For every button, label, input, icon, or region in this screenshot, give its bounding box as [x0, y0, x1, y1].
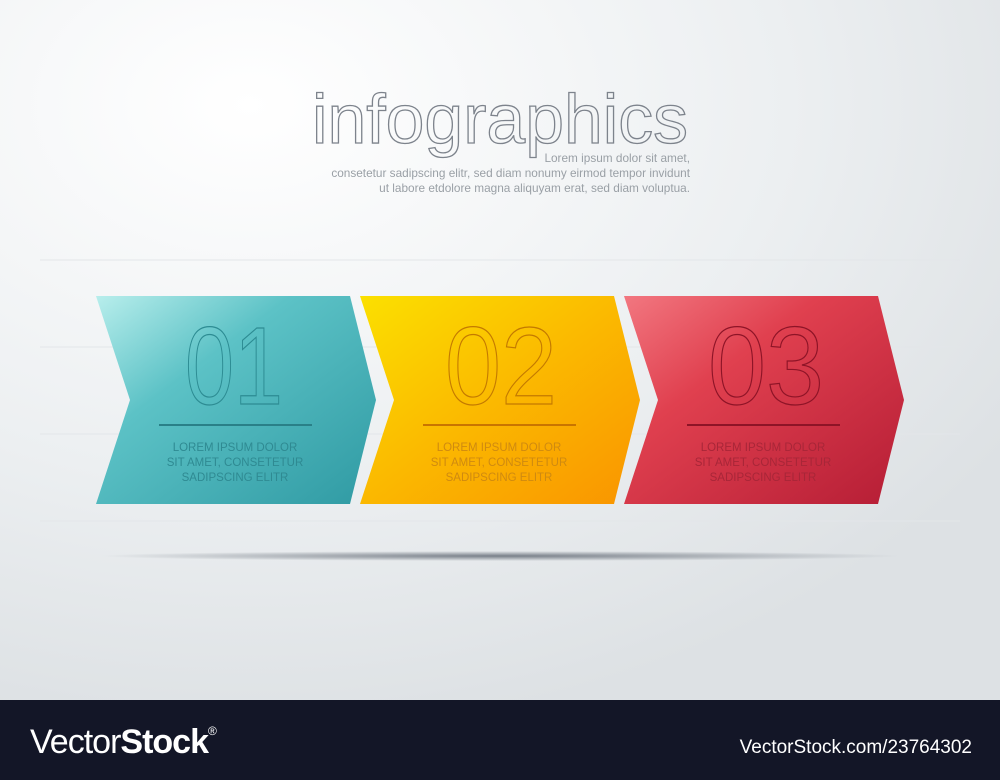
panel: step 03: SIT AMET, CONSETETUR	[695, 457, 831, 469]
panel: step 02	[360, 296, 640, 504]
panel: step 03: LOREM IPSUM DOLOR	[701, 442, 825, 454]
panel: step 01: 01	[185, 305, 283, 428]
footer bar: ®	[208, 724, 217, 738]
subtitle text	[331, 151, 691, 195]
panel: step 02: LOREM IPSUM DOLOR	[437, 442, 561, 454]
panel: step 02: SIT AMET, CONSETETUR	[431, 457, 567, 469]
footer bar: VectorStock.com/23764302	[740, 737, 972, 758]
panel: step 01: SIT AMET, CONSETETUR	[167, 457, 303, 469]
subtitle text: ut labore etdolore magna aliquyam erat, sed diam voluptua.	[379, 181, 690, 195]
title: infographics	[312, 80, 688, 158]
shadow	[100, 551, 900, 561]
panel: step 01: SADIPSCING ELITR	[182, 472, 288, 484]
footer bar: VectorStock	[30, 723, 208, 761]
panel: step 01: LOREM IPSUM DOLOR	[173, 442, 297, 454]
footer bar	[0, 700, 1000, 780]
panel: step 03: 03	[708, 305, 824, 428]
panel: step 03: SADIPSCING ELITR	[710, 472, 816, 484]
panel: step 02: SADIPSCING ELITR	[446, 472, 552, 484]
panel: step 03	[624, 296, 904, 504]
subtitle text: consetetur sadipscing elitr, sed diam nonumy eirmod tempor invidunt	[331, 166, 691, 180]
panel: step 01	[96, 296, 376, 504]
subtitle text: Lorem ipsum dolor sit amet,	[544, 151, 690, 165]
panel: step 02: 02	[445, 305, 557, 428]
